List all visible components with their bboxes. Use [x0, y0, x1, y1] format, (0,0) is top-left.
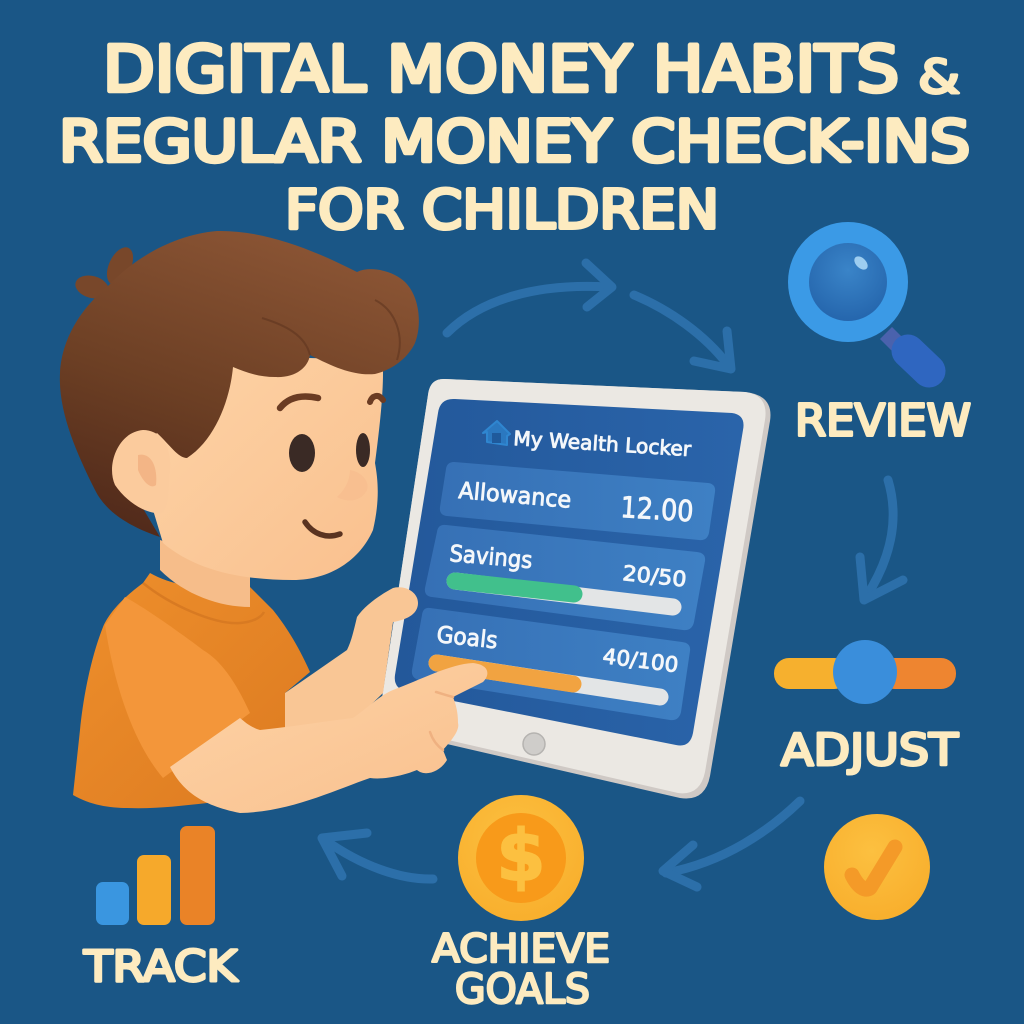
back arm [285, 587, 418, 730]
title: FOR CHILDREN [285, 178, 719, 241]
achieve goals label: GOALS [455, 965, 590, 1013]
eyes [289, 434, 315, 472]
app header: My Wealth Locker [513, 426, 693, 461]
goals row [412, 608, 690, 720]
front arm [170, 663, 487, 813]
face [150, 355, 383, 580]
savings row: 20/50 [621, 561, 688, 592]
title [59, 33, 970, 241]
savings row [425, 525, 705, 630]
review icon [788, 222, 929, 371]
shirt [73, 573, 310, 808]
nose [337, 470, 368, 501]
review label: REVIEW [795, 396, 971, 446]
savings row: Savings [448, 541, 533, 574]
magnifier grip [908, 351, 929, 371]
title: & [918, 50, 960, 104]
goals row: Goals [435, 622, 499, 654]
tablet [381, 379, 770, 799]
track label: TRACK [83, 943, 238, 992]
allowance row: Allowance [457, 478, 572, 514]
cycle arrows [322, 263, 903, 887]
neck [160, 540, 250, 607]
tablet frame [381, 379, 766, 793]
magnifier lens [809, 243, 887, 321]
home button [523, 733, 545, 755]
achieve goals label [432, 927, 610, 1013]
tablet screen [395, 399, 744, 746]
icon: bar chart [96, 826, 215, 925]
icon: check badge [824, 814, 930, 920]
ear [112, 430, 170, 513]
boy illustration [60, 231, 419, 808]
achieve goals label: ACHIEVE [432, 927, 610, 972]
mouth [305, 522, 340, 536]
eyebrows [280, 396, 318, 408]
icon: coin [458, 795, 584, 921]
allowance row [440, 462, 715, 540]
tablet edge [381, 379, 770, 799]
title: DIGITAL MONEY HABITS [103, 33, 899, 106]
magnifier ring [788, 222, 908, 342]
hair [60, 231, 419, 537]
adjust label: ADJUST [781, 726, 958, 776]
title: REGULAR MONEY CHECK-INS [59, 109, 970, 175]
adjust icon [774, 640, 956, 704]
magnifier stem [886, 333, 900, 347]
allowance row: 12.00 [620, 490, 695, 528]
icon: coin: $ [497, 815, 545, 897]
hands and arm [170, 587, 487, 813]
goals row: 40/100 [601, 644, 680, 677]
